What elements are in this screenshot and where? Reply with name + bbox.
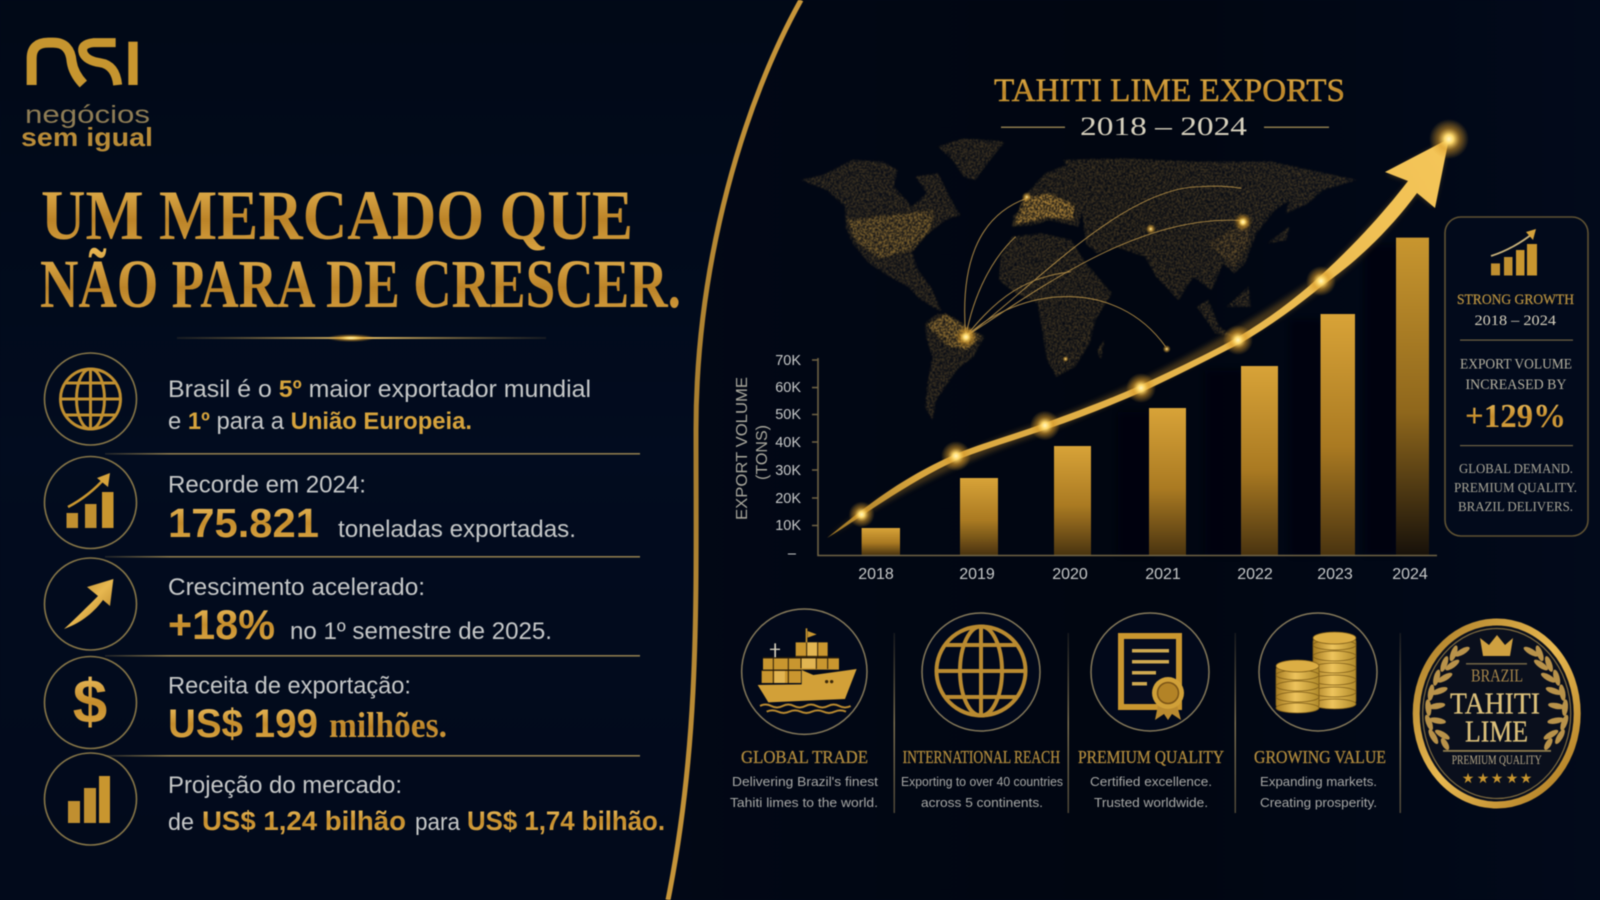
row 1: exporter rank xyxy=(44,353,591,445)
logo wordmark bottom: sem igual xyxy=(21,122,153,152)
x axis labels xyxy=(858,566,1428,583)
text: projection: para xyxy=(415,809,461,836)
world map with routes xyxy=(801,138,1356,420)
icon: coins xyxy=(1259,613,1377,731)
heading: STRONG GROWTH xyxy=(1457,292,1574,308)
seal text: LIME xyxy=(1465,714,1528,749)
description: Certified excellence. xyxy=(1090,774,1212,789)
icon: certificate xyxy=(1091,613,1209,731)
seal text: PREMIUM QUALITY xyxy=(1452,753,1542,767)
description xyxy=(1090,774,1212,810)
routes xyxy=(965,186,1243,347)
growth arrow xyxy=(827,119,1469,538)
stars: ★ xyxy=(1462,770,1474,786)
label: PREMIUM QUALITY xyxy=(1078,747,1224,767)
icon: rising bars xyxy=(44,456,136,548)
data point glows xyxy=(849,119,1469,528)
y axis labels: 60K xyxy=(775,380,801,396)
feature: global trade xyxy=(730,609,878,810)
description: Expanding markets. xyxy=(1260,774,1377,789)
stars: ★ xyxy=(1506,770,1518,786)
label: GLOBAL TRADE xyxy=(741,747,868,767)
stat text: EXPORT VOLUME xyxy=(1460,357,1572,373)
closing text: GLOBAL DEMAND. xyxy=(1459,462,1573,477)
text: record: Recorde em 2024: xyxy=(168,472,366,498)
stat text: INCREASED BY xyxy=(1466,377,1567,393)
continents xyxy=(801,138,1356,420)
icon: globe xyxy=(44,353,136,445)
label: GROWING VALUE xyxy=(1254,747,1386,767)
laurels xyxy=(1423,644,1570,751)
y axis title xyxy=(734,377,771,520)
description xyxy=(1260,774,1377,810)
description: Delivering Brazil's finest xyxy=(732,774,878,789)
stars: ★ xyxy=(1520,770,1532,786)
stat panel: strong growth xyxy=(1445,217,1588,536)
y axis labels: – xyxy=(788,546,797,562)
title divider with glow xyxy=(177,334,546,342)
text: projection: Projeção do mercado: xyxy=(168,772,402,799)
description: Trusted worldwide. xyxy=(1094,795,1208,810)
main title xyxy=(40,177,681,322)
x axis labels: 2019 xyxy=(959,566,995,583)
text: growth xyxy=(168,574,552,648)
icon: arrow xyxy=(44,558,136,650)
text: revenue: US$ 199 xyxy=(168,702,318,746)
y axis title: (TONS) xyxy=(754,425,771,480)
text: revenue xyxy=(168,672,447,746)
bars xyxy=(862,238,1429,555)
heading: 2018 – 2024 xyxy=(1474,313,1557,329)
bright regions xyxy=(847,193,1249,350)
icon: bars xyxy=(44,753,136,845)
text: growth: Crescimento acelerado: xyxy=(168,574,425,601)
stars xyxy=(1462,770,1532,786)
description xyxy=(901,774,1063,810)
logo: NSI negócios sem igual xyxy=(21,42,153,152)
stat text xyxy=(1460,357,1572,393)
y axis labels: 70K xyxy=(775,353,801,369)
stat value: +129% xyxy=(1465,398,1566,435)
seal text xyxy=(1450,666,1542,767)
stars: ★ xyxy=(1491,770,1503,786)
closing text: BRAZIL DELIVERS. xyxy=(1458,500,1573,515)
bar chart xyxy=(734,238,1437,583)
y axis labels: 20K xyxy=(775,491,801,507)
icon: growth bars xyxy=(1491,229,1537,276)
axes xyxy=(812,358,1437,556)
heading xyxy=(1457,292,1574,329)
text: record: toneladas exportadas. xyxy=(338,516,576,543)
feature: growing value xyxy=(1254,613,1386,810)
route hubs xyxy=(955,192,1252,362)
x axis labels: 2020 xyxy=(1052,566,1088,583)
logo mark xyxy=(32,42,138,85)
arrow body xyxy=(827,139,1449,538)
text: record: 175.821 xyxy=(168,500,319,546)
description: Exporting to over 40 countries xyxy=(901,774,1063,789)
closing text xyxy=(1454,462,1577,515)
bar shadows xyxy=(1118,245,1398,555)
seal text: TAHITI xyxy=(1450,685,1540,720)
text: exporter rank: e 1º para a União Europeia. xyxy=(168,408,472,435)
x axis labels: 2024 xyxy=(1392,566,1428,583)
text: growth: +18% xyxy=(168,601,275,648)
description: Tahiti limes to the world. xyxy=(730,795,878,810)
feature: international reach xyxy=(901,613,1063,810)
y axis labels: 40K xyxy=(775,435,801,451)
description: Creating prosperity. xyxy=(1260,795,1377,810)
crown xyxy=(1480,635,1513,656)
description: across 5 continents. xyxy=(921,795,1043,810)
icon: globe xyxy=(922,613,1040,731)
text: exporter rank: Brasil é o 5º maior exportador mundial xyxy=(168,376,591,403)
row 5: projection xyxy=(44,753,665,845)
text: projection xyxy=(168,772,665,836)
y axis labels xyxy=(775,353,801,562)
label: INTERNATIONAL REACH xyxy=(903,747,1060,767)
x axis labels: 2018 xyxy=(858,566,894,583)
text: record xyxy=(168,472,576,546)
main title: NÃO PARA DE CRESCER. xyxy=(40,246,681,322)
closing text: PREMIUM QUALITY. xyxy=(1454,481,1577,496)
text: growth: no 1º semestre de 2025. xyxy=(290,618,552,645)
y axis labels: 10K xyxy=(775,518,801,534)
text: projection: de xyxy=(168,809,194,836)
row 3: growth xyxy=(44,558,552,650)
description xyxy=(730,774,878,810)
y axis labels: 30K xyxy=(775,463,801,479)
icon: dollar: $ xyxy=(73,668,107,737)
text: projection: US$ 1,24 bilhão xyxy=(202,806,406,836)
text: revenue: milhões. xyxy=(329,705,447,745)
feature: premium quality xyxy=(1078,613,1224,810)
x axis labels: 2021 xyxy=(1145,566,1181,583)
text: projection: US$ 1,74 bilhão. xyxy=(467,806,665,836)
x axis labels: 2023 xyxy=(1317,566,1353,583)
row 4: revenue xyxy=(44,656,447,748)
seal text: BRAZIL xyxy=(1471,666,1523,686)
y axis labels: 50K xyxy=(775,407,801,423)
icon: dollar xyxy=(44,656,136,748)
icon: ship xyxy=(742,609,867,734)
chart title: 2018 – 2024 xyxy=(1080,112,1247,141)
x axis labels: 2022 xyxy=(1237,566,1273,583)
logo wordmark top: negócios xyxy=(25,101,150,129)
row 2: record xyxy=(44,456,576,548)
chart title: TAHITI LIME EXPORTS xyxy=(994,73,1345,109)
chart title xyxy=(994,73,1345,141)
main title: UM MERCADO QUE xyxy=(41,177,633,255)
stars: ★ xyxy=(1477,770,1489,786)
text: exporter rank xyxy=(168,376,591,435)
y axis title: EXPORT VOLUME xyxy=(734,377,751,520)
arrow glow xyxy=(827,139,1449,538)
text: revenue: Receita de exportação: xyxy=(168,672,411,700)
curved gold divider arc xyxy=(668,0,801,900)
seal: Brazil Tahiti Lime xyxy=(1416,622,1577,805)
